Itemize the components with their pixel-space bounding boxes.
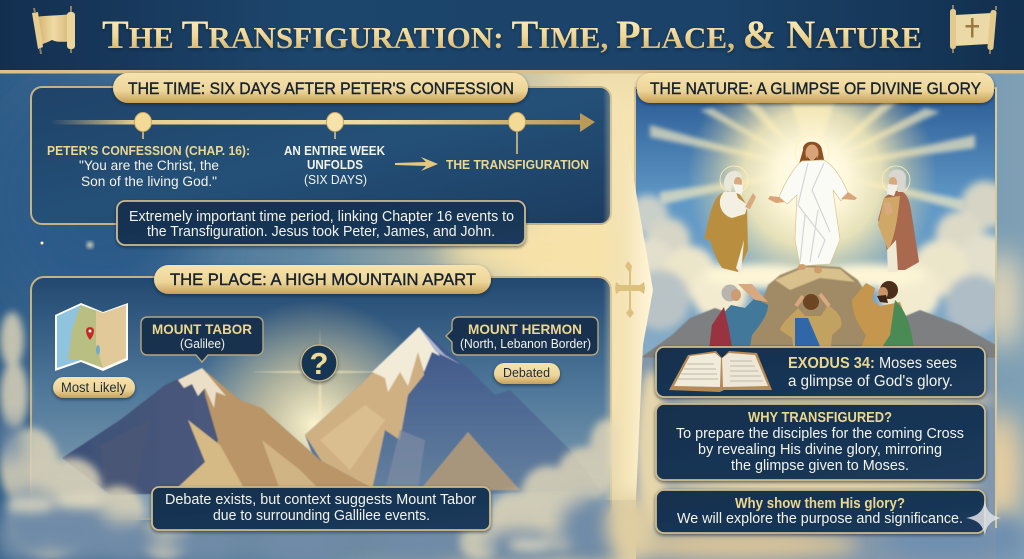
panel: the time: [31, 73, 611, 245]
callout: debate exists: [152, 487, 490, 530]
header banner: [0, 0, 1024, 74]
icon: map: [55, 303, 128, 371]
illustration: transfiguration scene: [636, 103, 995, 358]
callout: Mount Hermon: MOUNT HERMON: [468, 321, 582, 337]
callout: Mount Tabor: (Galilee): [180, 337, 225, 351]
callout: Mount Hermon: (North, Lebanon Border): [460, 337, 591, 351]
callout: debate exists: Debate exists, but context suggests Mount Tabor: [165, 492, 476, 508]
figure: disciple center: [780, 292, 842, 346]
text: an entire week: [284, 143, 386, 187]
callout: Mount Hermon: [446, 317, 598, 355]
icon: question mark: ?: [310, 346, 328, 381]
box: Exodus 34: EXODUS 34: Moses sees: [788, 355, 957, 372]
figure: disciple left: [710, 284, 768, 346]
light rays: [650, 100, 975, 212]
icon: open book: [669, 351, 772, 392]
timeline arrow: [50, 112, 595, 154]
heading: the nature: [637, 73, 994, 103]
box: why show them his glory: We will explore the purpose and significance.: [677, 511, 963, 527]
callout: debate exists: due to surrounding Gallilee events.: [213, 508, 430, 524]
icon: sparkle: [966, 500, 1001, 536]
rock summit: [750, 265, 866, 346]
text: Peter's confession: Son of the living God.": [81, 174, 217, 189]
label: debated: [494, 363, 560, 384]
box: Exodus 34: [656, 347, 985, 397]
clouds: foreground: [0, 312, 624, 559]
box: why show them his glory: [656, 490, 985, 533]
figure: Moses: [704, 166, 756, 274]
heading: the place: THE PLACE: A HIGH MOUNTAIN APART: [170, 270, 476, 289]
text: the transfiguration: THE TRANSFIGURATION: [446, 157, 589, 172]
label: most likely: [53, 377, 135, 398]
arrow: to transfiguration: [395, 157, 438, 171]
callout: time period: the Transfiguration. Jesus took Peter, James, and John.: [147, 224, 495, 240]
box: why transfigured: To prepare the disciples for the coming Cross: [676, 426, 964, 442]
box: why transfigured: WHY TRANSFIGURED?: [748, 410, 892, 426]
figure: Elijah: [878, 166, 919, 272]
box: Exodus 34: a glimpse of God's glory.: [788, 373, 953, 390]
light beam with cross: [603, 80, 658, 559]
box: why transfigured: the glimpse given to Moses.: [731, 458, 909, 474]
icon: scroll left: [32, 6, 75, 54]
lower right background behind boxes: [620, 88, 1005, 559]
panel: the place: [31, 265, 611, 550]
box: why transfigured: [656, 404, 985, 480]
icon: gold cross: [615, 261, 645, 318]
title: THE TRANSFIGURATION: TIME, PLACE, & NATURE: [102, 12, 922, 57]
text: Peter's confession: "You are the Christ, the: [79, 158, 219, 173]
mountain: Hermon: [305, 327, 600, 500]
callout: time period: [117, 201, 525, 245]
heading: the time: THE TIME: SIX DAYS AFTER PETER'S CONFESSION: [128, 79, 514, 98]
heading: the place: [154, 265, 491, 294]
box: why show them his glory: Why show them His glory?: [735, 496, 905, 512]
callout: Mount Tabor: [141, 317, 263, 362]
label: most likely: Most Likely: [61, 380, 126, 395]
text: an entire week: UNFOLDS: [307, 157, 363, 172]
box: why transfigured: by revealing His divine glory, mirroring: [698, 442, 942, 458]
label: debated: Debated: [503, 365, 550, 380]
heading: the nature: THE NATURE: A GLIMPSE OF DIVINE GLORY: [650, 79, 981, 98]
text: Peter's confession: [47, 143, 250, 189]
callout: Mount Tabor: MOUNT TABOR: [152, 321, 252, 337]
callout: time period: Extremely important time period, linking Chapter 16 events to: [129, 209, 514, 225]
text: an entire week: (SIX DAYS): [304, 172, 367, 187]
figure: disciple right: [852, 281, 914, 346]
mountain: Tabor: [62, 368, 372, 495]
bottom mountain: [640, 308, 996, 358]
clouds in panel: [626, 181, 1013, 335]
icon: scroll with cross: [950, 5, 997, 54]
text: Peter's confession: PETER'S CONFESSION (CHAP. 16):: [47, 143, 250, 158]
icon: question mark: [301, 345, 337, 381]
figure: Jesus: [768, 135, 857, 274]
text: an entire week: AN ENTIRE WEEK: [284, 143, 386, 158]
heading: the time: [113, 73, 528, 103]
panel: the nature: [634, 72, 997, 358]
